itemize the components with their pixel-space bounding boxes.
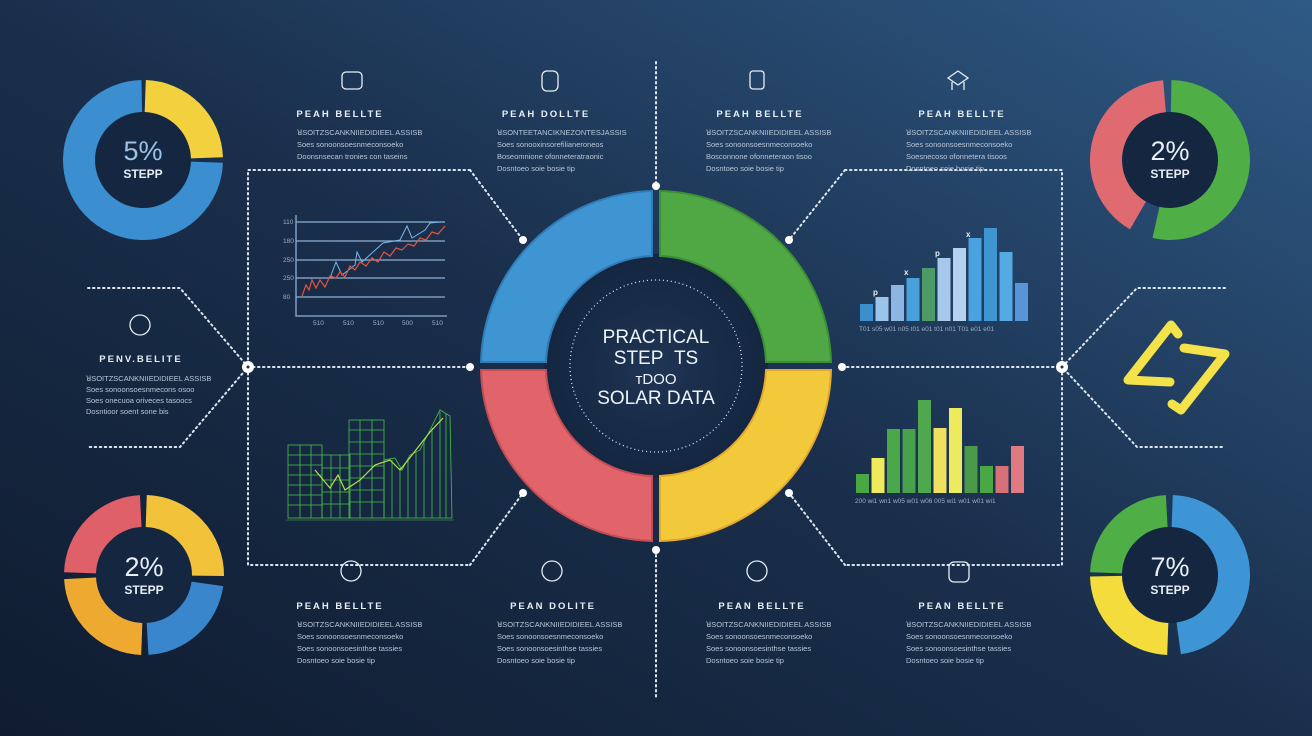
title: SOLAR DATA (597, 388, 715, 409)
donut: top-right 2% (1083, 73, 1257, 247)
icon: yellow bracket (1128, 325, 1225, 410)
text: ꓤSOITZSCANKNIIEDIDIEEL ASSISB (706, 620, 831, 629)
text block: top 2: Dosntoeo soie bosie tip (497, 164, 575, 173)
text block: top 2: ꓤSONTEETANCIKNEZONTESJASSIS (497, 128, 627, 137)
text block: left: Soes sonoonsoesnmecons osoo (86, 385, 194, 394)
line chart: 510 (313, 320, 324, 327)
donut: top-left 5%: 5% (123, 136, 163, 166)
text block: left: PENV.BELITE (99, 354, 183, 365)
text: Dosntoeo soie bosie tip (906, 656, 984, 665)
central ring (481, 191, 831, 541)
text block: top 2: PEAH DOLLTE (502, 109, 590, 120)
text block: top 3: ꓤSOITZSCANKNIIEDIDIEEL ASSISB (706, 128, 831, 137)
line chart: 250 (283, 257, 294, 264)
bar chart: blue: x (966, 230, 971, 239)
text block: top 2 (497, 71, 627, 173)
title: PRACTICAL (603, 327, 709, 348)
text: Soes sonoonsoesnmeconsoeko (497, 632, 603, 641)
text: ꓤSOITZSCANKNIIEDIDIEEL ASSISB (906, 620, 1031, 629)
connector lines (88, 62, 1225, 700)
text block: top 3 (706, 71, 831, 173)
text block: top 3: Bosconnone ofonneteraon tisoo (706, 152, 812, 161)
bar chart: green/yellow/red: 200 wi1 wn1 w05 w01 w06 005 wi1 w01 w01 wi1 (855, 498, 996, 505)
text: Soes sonoonsoesnmeconsoeko (906, 632, 1012, 641)
bar chart: blue: p (873, 288, 878, 297)
bar chart: green/yellow/red (855, 400, 1024, 505)
text block: top 1: Soes sonoonsoesnmeconsoeko (297, 140, 403, 149)
text: Dosntoeo soie bosie tip (497, 656, 575, 665)
bar chart: blue (859, 228, 1028, 333)
text: PEAN DOLITE (510, 601, 596, 612)
line chart (283, 215, 447, 327)
donut: bottom-left 2%: STEPP (124, 583, 164, 597)
text block: left (86, 315, 211, 416)
title: STEP TS (614, 348, 698, 369)
wireframe chart (286, 410, 454, 520)
donut: bottom-right 7%: STEPP (1150, 583, 1190, 597)
text: Soes sonoonsoesinthse tassies (706, 644, 811, 653)
donut: top-right 2%: 2% (1150, 136, 1190, 166)
donut: bottom-right 7%: 7% (1150, 552, 1190, 582)
text: PEAN BELLTE (718, 601, 806, 612)
line chart: 180 (283, 238, 294, 245)
text block: top 2: Soes sonooxinsorefilianeroneos (497, 140, 604, 149)
text blocks: bottom: ꓤSOITZSCANKNIIEDIDIEEL ASSISB (297, 620, 422, 629)
bar chart: blue: T01 s05 w01 n05 t01 e01 t01 n01 T01 e01 e01 (859, 326, 994, 333)
bar chart: blue: p (935, 249, 940, 258)
text block: top 4: ꓤSOITZSCANKNIIEDIDIEEL ASSISB (906, 128, 1031, 137)
text blocks: bottom (296, 561, 422, 665)
text blocks: bottom: Dosntoeo soie bosie tip (297, 656, 375, 665)
line chart: 510 (432, 320, 443, 327)
line chart: 510 (343, 320, 354, 327)
line chart: 500 (402, 320, 413, 327)
text blocks: bottom: Soes sonoonsoesnmeconsoeko (297, 632, 403, 641)
text: Soes sonoonsoesinthse tassies (497, 644, 602, 653)
donut: bottom-left 2% (72, 503, 216, 647)
line chart: 250 (283, 275, 294, 282)
text block: top 3: PEAH BELLTE (716, 109, 804, 120)
text block: top 1: ꓤSOITZSCANKNIIEDIDIEEL ASSISB (297, 128, 422, 137)
donut: top-left 5%: STEPP (123, 167, 163, 181)
text block: top 4: Soes sonoonsoesnmeconsoeko (906, 140, 1012, 149)
text: Soes sonoonsoesnmeconsoeko (706, 632, 812, 641)
text blocks: bottom: Soes sonoonsoesinthse tassies (297, 644, 402, 653)
text block: top 4: PEAH BELLTE (918, 109, 1006, 120)
title (597, 327, 715, 409)
title: ᴛDOO (635, 371, 677, 388)
text blocks: bottom: PEAH BELLTE (296, 601, 384, 612)
text block: top 3: Dosntoeo soie bosie tip (706, 164, 784, 173)
text block: top 1 (296, 72, 422, 161)
donut: bottom-left 2%: 2% (124, 552, 164, 582)
donut: top-right 2%: STEPP (1150, 167, 1190, 181)
donut: bottom-right 7% (1104, 509, 1236, 641)
bar chart: blue: x (904, 268, 909, 277)
text: PEAN BELLTE (918, 601, 1006, 612)
line chart: 510 (373, 320, 384, 327)
text: Dosntoeo soie bosie tip (706, 656, 784, 665)
donut: top-left 5% (77, 94, 209, 226)
line chart: 80 (283, 294, 291, 301)
text: Soes sonoonsoesinthse tassies (906, 644, 1011, 653)
text block: top 3: Soes sonoonsoesnmeconsoeko (706, 140, 812, 149)
text block: top 2: Boseomnione ofonneteratraonic (497, 152, 604, 161)
text block: left: Dosntioor soent sone bis (86, 407, 169, 416)
text block: top 1: Doonsnsecan tronies con taseins (297, 152, 408, 161)
text block: top 4: Dosntoeo soie bosie tip (906, 164, 984, 173)
text block: top 4 (906, 71, 1031, 173)
text block: left: ꓤSOITZSCANKNIIEDIDIEEL ASSISB (86, 374, 211, 383)
line chart: 110 (283, 219, 294, 226)
text: ꓤSOITZSCANKNIIEDIDIEEL ASSISB (497, 620, 622, 629)
text block: left: Soes onecuoa oriveces tasoocs (86, 396, 192, 405)
text block: top 1: PEAH BELLTE (296, 109, 384, 120)
text block: top 4: Soesnecoso ofonnetera tisoos (906, 152, 1007, 161)
